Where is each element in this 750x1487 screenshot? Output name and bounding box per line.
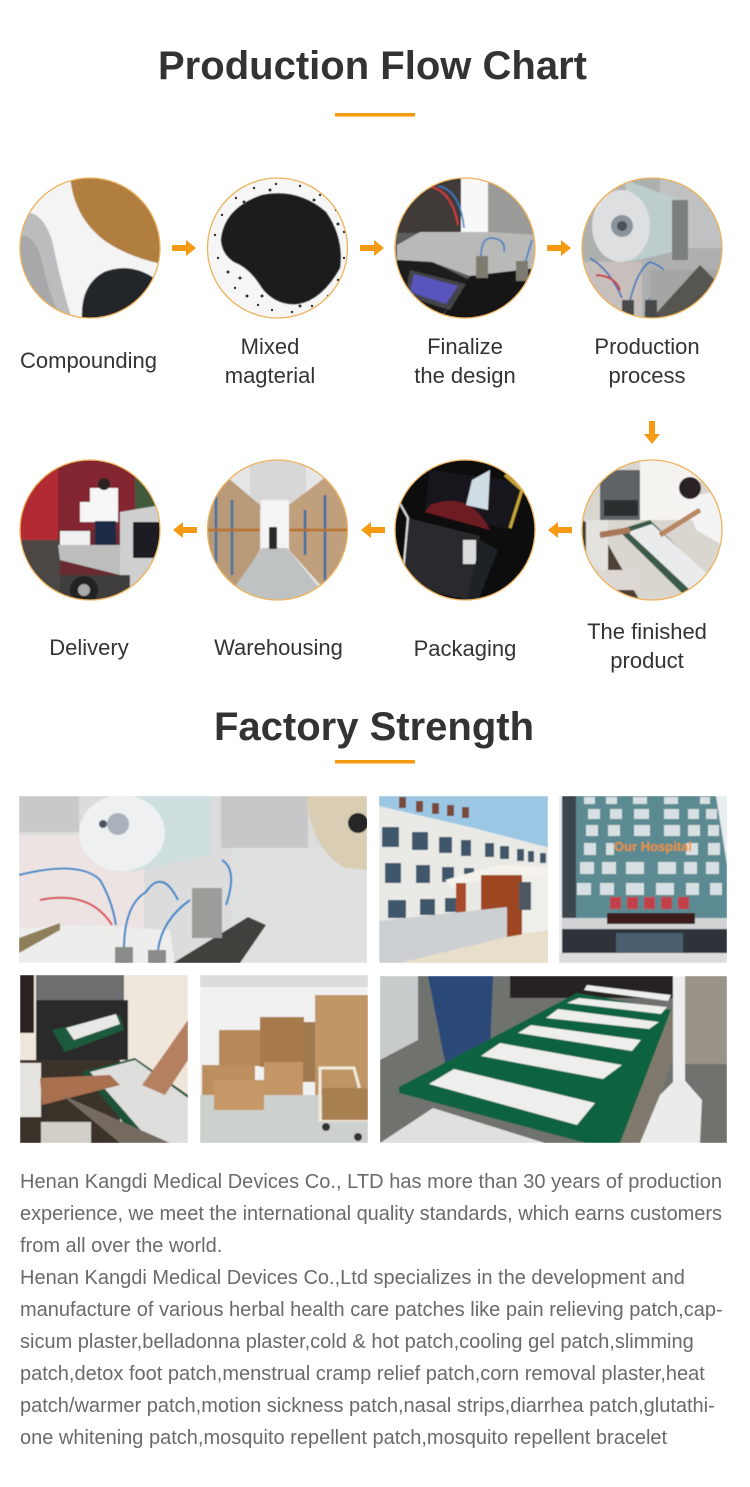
photo: warehouse boxes [200,975,368,1143]
label: Finalize the design: Finalize [427,334,503,359]
icon: mixed material photo [207,178,348,318]
title: Production Flow Chart: Production Flow Chart [158,44,587,88]
label: Production process: Production [594,334,700,359]
photo: machine with roll [19,795,368,963]
text block: company description: patch/warmer patch,motion sickness patch,nasal strips,diarrhea patch,glutathi- [20,1395,715,1417]
icon: finalize design photo [395,178,538,320]
label: The finished product [587,619,707,673]
text block: company description: experience, we meet the international quality standards, which earns customers [20,1203,722,1225]
label: Finalize the design: the design [414,363,516,388]
down arrow [644,421,660,444]
text block: company description: Henan Kangdi Medical Devices Co.,Ltd specializes in the development and [20,1267,685,1289]
photo: workers at line [20,975,188,1143]
arrow [548,522,572,538]
label: Mixed magterial: Mixed [241,334,299,359]
text block: company description: sicum plaster,belladonna plaster,cold & hot patch,cooling gel patch,slimming [20,1331,694,1353]
icon: finished product photo [582,460,723,601]
arrow [173,522,197,538]
arrow [360,240,384,256]
text block: company description: manufacture of various herbal health care patches like pain relieving patch,cap- [20,1299,723,1321]
label: Production process [594,334,700,388]
text block: company description [20,1171,723,1449]
label: Compounding: Compounding [20,348,157,373]
icon: packaging photo [395,460,536,601]
arrow [547,240,571,256]
icon: warehousing photo [207,460,348,601]
label: Finalize the design [414,334,516,388]
heading: Factory Strength: Factory Strength [214,705,534,749]
text block: company description: one whitening patch,mosquito repellent patch,mosquito repellent bracelet [20,1427,668,1449]
text block: company description: from all over the world. [20,1235,222,1257]
photo: hospital building: Our Hospital [614,839,692,854]
label: The finished product: The finished [587,619,707,644]
photo: green conveyor [380,976,727,1143]
label: Mixed magterial: magterial [225,363,315,388]
text block: company description: Henan Kangdi Medical Devices Co., LTD has more than 30 years of production [20,1171,722,1193]
label: Delivery: Delivery [49,635,129,660]
label: Warehousing: Warehousing [214,635,343,660]
heading underline [335,760,415,764]
text block: company description: patch,detox foot patch,menstrual cramp relief patch,corn removal plaster,heat [20,1363,705,1385]
icon: delivery photo [20,460,163,605]
label: Production process: process [608,363,686,388]
arrow [361,522,385,538]
title underline [335,113,415,116]
icon: compounding photo [18,176,162,320]
label: Mixed magterial [225,334,315,388]
arrow [172,240,196,256]
icon: production process photo [582,178,723,322]
label: The finished product: product [610,648,684,673]
label: Packaging: Packaging [414,636,516,661]
photo: hospital building [559,796,727,963]
photo: factory building [379,796,550,963]
